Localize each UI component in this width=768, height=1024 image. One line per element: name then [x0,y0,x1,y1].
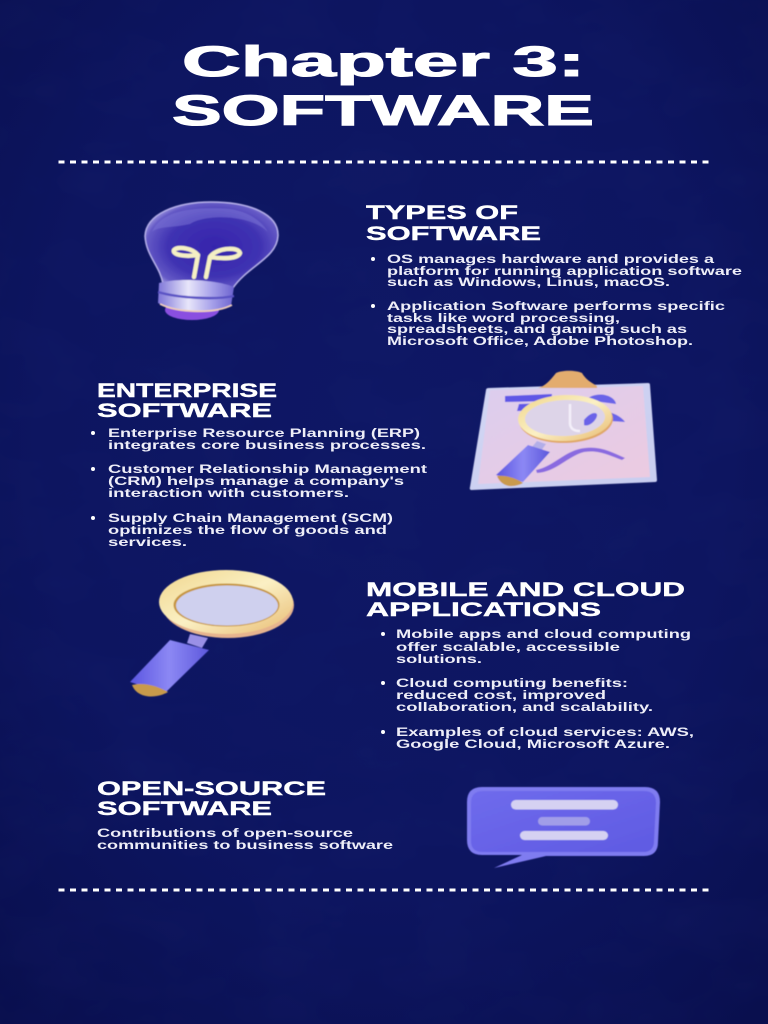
bullet list: mobile and cloud: Cloud computing benefits: [396,676,628,690]
bullet list: enterprise software: interaction with customers. [108,486,349,500]
bullet list: mobile and cloud: Examples of cloud services: AWS, [396,725,694,739]
bullet list: types of software: spreadsheets, and gaming such as [387,322,688,336]
bullet list: enterprise software: Enterprise Resource Planning (ERP) [108,426,420,440]
bullet list: types of software: tasks like word processing, [387,311,620,325]
bullet list: mobile and cloud: Mobile apps and cloud computing [396,627,691,641]
text: open-source description [97,826,394,852]
bullet list: types of software: such as Windows, Linus, macOS. [387,275,670,289]
heading: enterprise software [97,381,277,422]
heading: types of software: SOFTWARE [366,224,541,245]
bullet list: mobile and cloud: collaboration, and scalability. [396,700,653,714]
heading: enterprise software: ENTERPRISE [97,381,277,402]
section: types of software [366,203,743,348]
heading: open-source software: SOFTWARE [97,799,272,820]
heading: enterprise software: SOFTWARE [97,401,272,422]
bullet list: enterprise software: (CRM) helps manage a company's [108,474,405,488]
bullet list: mobile and cloud: Google Cloud, Microsoft Azure. [396,737,670,751]
bullet list: mobile and cloud: offer scalable, accessible [396,640,621,654]
heading: types of software [366,203,541,245]
heading: types of software: TYPES OF [366,203,518,224]
bullet list: enterprise software: Supply Chain Management (SCM) [108,511,393,525]
section: mobile and cloud applications [366,580,694,751]
bullet list: mobile and cloud: solutions. [396,652,482,666]
icon: magnifying glass [130,570,294,696]
text: open-source description: communities to business software [97,838,394,852]
title [172,38,594,135]
heading: open-source software: OPEN-SOURCE [97,779,326,800]
bullet list: enterprise software: integrates core business processes. [108,438,426,452]
bullet list: types of software [371,252,743,348]
text: open-source description: Contributions of open-source [97,826,354,840]
bullet list: enterprise software: services. [108,535,187,549]
section: open-source software [97,779,394,852]
title: SOFTWARE [172,87,594,135]
icon: clipboard with magnifier [470,371,657,490]
bullet list: enterprise software: optimizes the flow of goods and [108,523,387,537]
icon: speech bubble [467,787,660,868]
title: Chapter 3: [182,38,585,86]
bullet list: enterprise software: Customer Relationship Management [108,462,427,476]
bullet list: types of software: OS manages hardware and provides a [387,252,715,266]
heading: mobile and cloud applications [366,580,685,621]
heading: mobile and cloud applications: APPLICATIONS [366,600,601,621]
bullet list: mobile and cloud [381,627,694,751]
bullet list: types of software: Microsoft Office, Adobe Photoshop. [387,334,693,348]
heading: open-source software [97,779,326,820]
section: enterprise software [91,381,427,549]
heading: mobile and cloud applications: MOBILE AND CLOUD [366,580,685,601]
bullet list: mobile and cloud: reduced cost, improved [396,688,606,702]
bullet list: enterprise software [91,426,427,549]
bullet list: types of software: platform for running application software [387,264,743,278]
bullet list: types of software: Application Software performs specific [387,299,726,313]
icon: light bulb [145,202,278,320]
